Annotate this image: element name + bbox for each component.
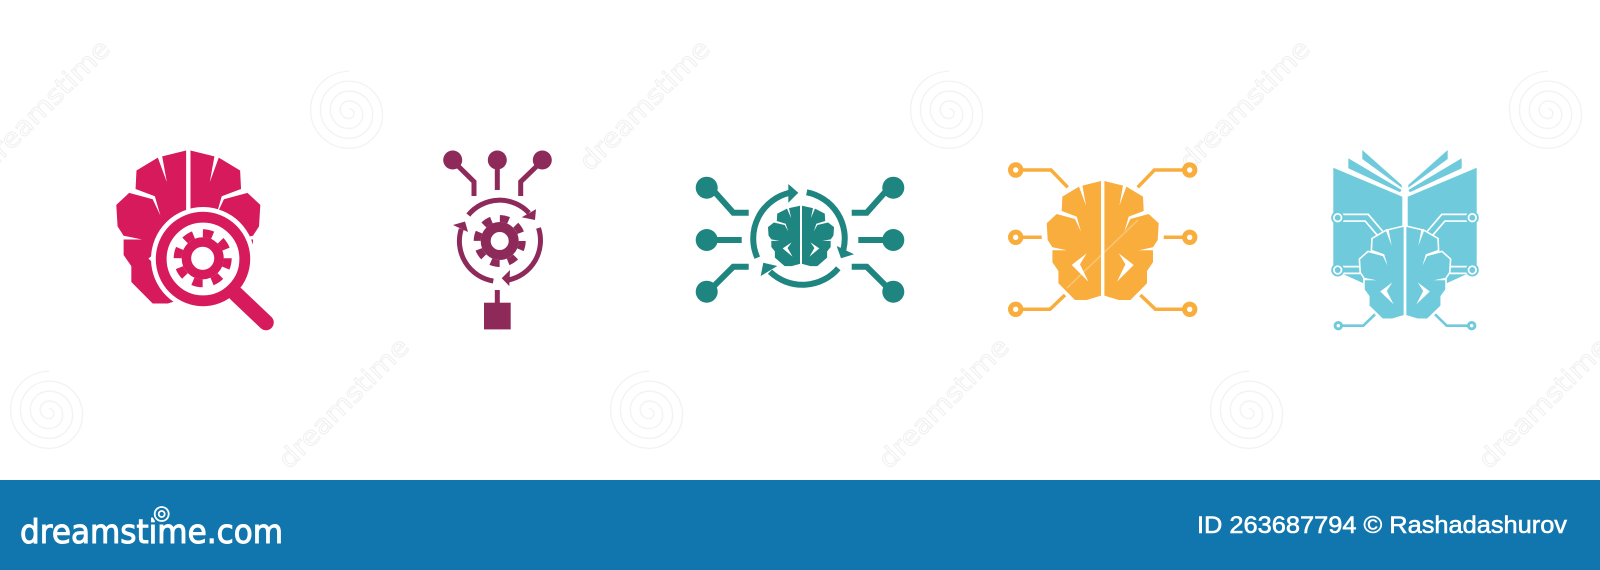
watermark layer: dreamstime: [1174, 34, 1317, 177]
watermark layer: dreamstime: [574, 34, 717, 177]
logo wordmark: dreamstime.com: [20, 512, 283, 551]
watermark layer: dreamstime: [873, 332, 1016, 475]
icon: brain in refresh cycle with circuit nodes: [696, 177, 904, 303]
icon: open book with circuit brain: [1331, 150, 1479, 329]
icon: brain with circuit connectors: [1010, 165, 1195, 314]
image id and author credit: ID 263687794 © Rashadashurov: [1197, 512, 1567, 539]
footer banner: [0, 480, 1600, 570]
watermark layer: dreamstime: [273, 332, 416, 475]
icon: brain under magnifying glass with gear: [116, 150, 266, 322]
watermark layer: [0, 34, 1600, 475]
icon: gear process with inputs and output box: [443, 150, 552, 329]
